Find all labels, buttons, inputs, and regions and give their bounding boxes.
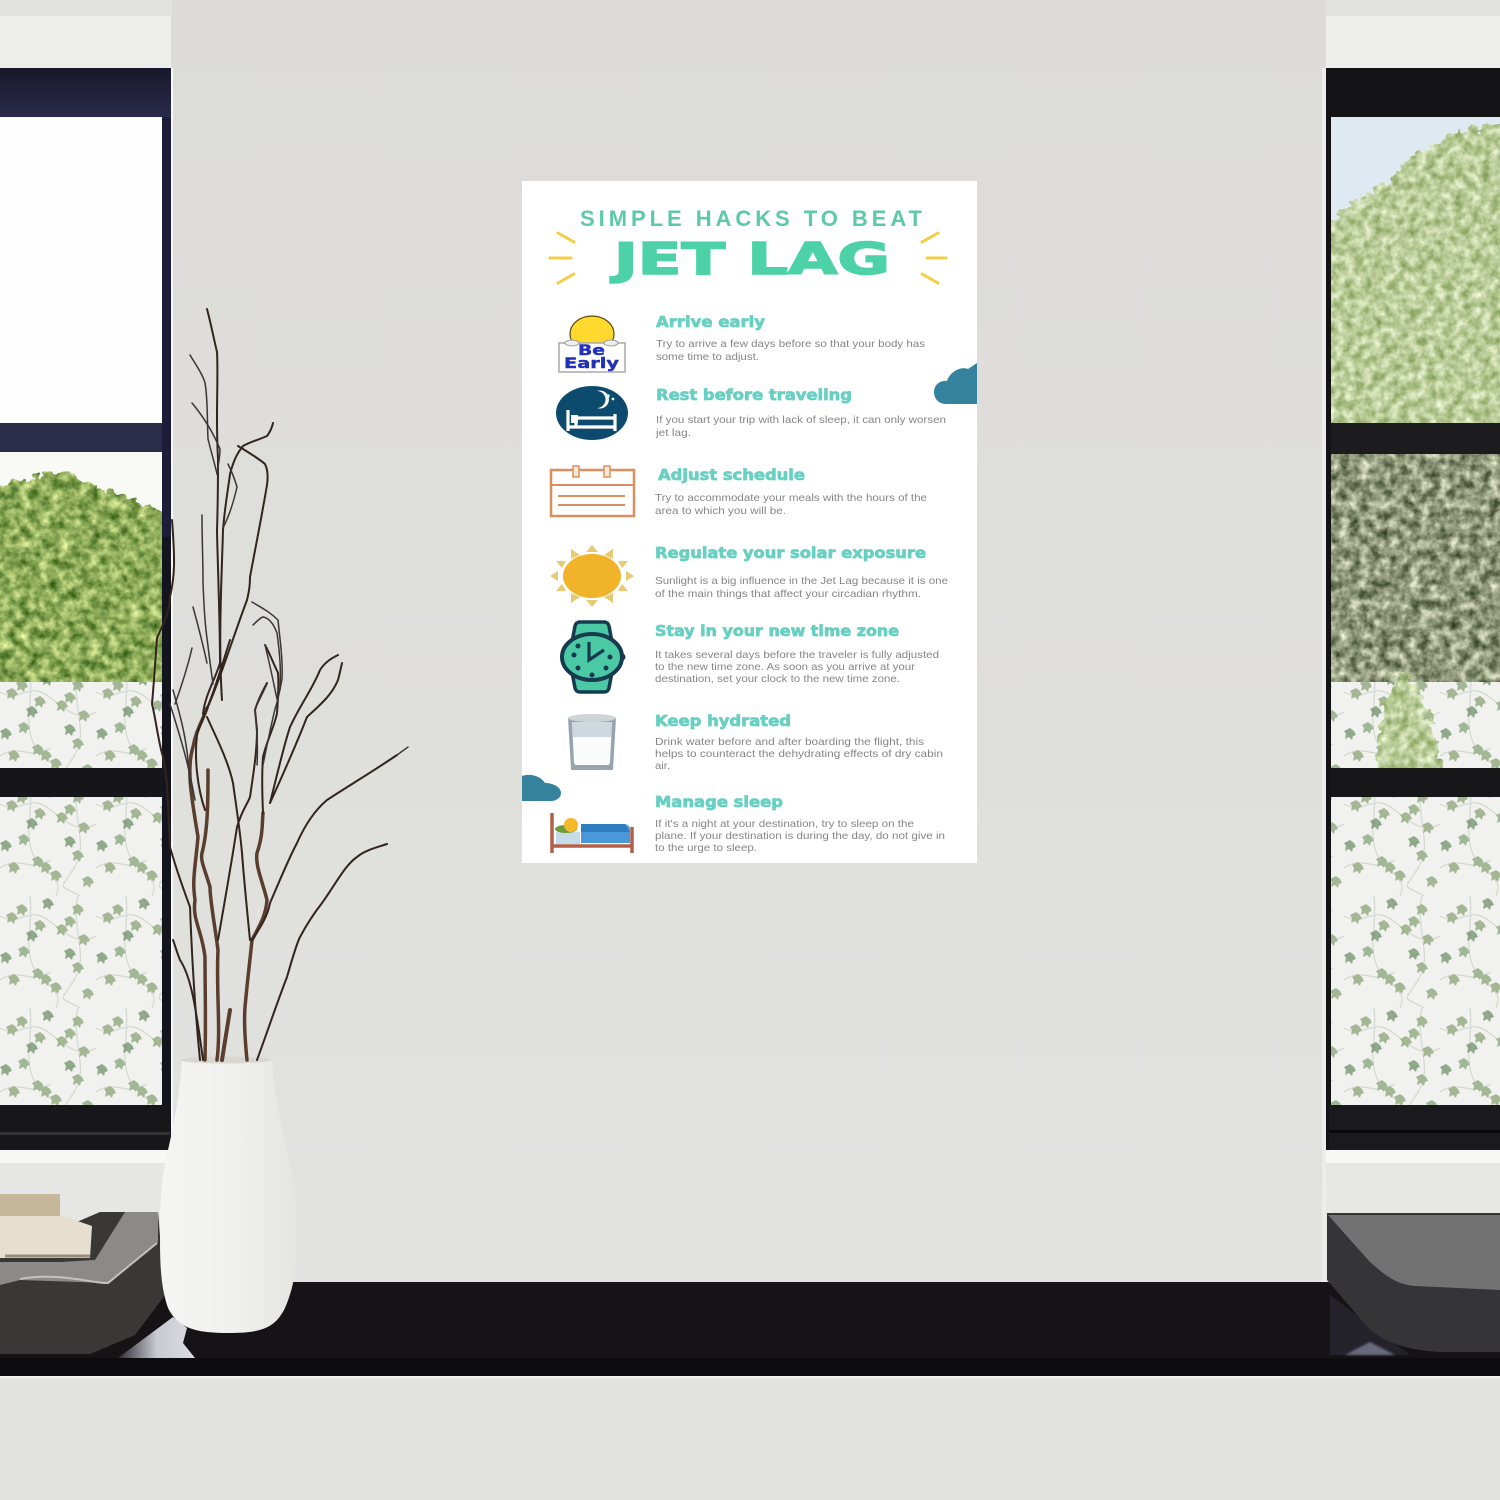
left window [0, 16, 173, 1163]
right window [1311, 0, 1500, 1288]
icon: calendar [551, 466, 634, 516]
right cushion top surface [1328, 1215, 1500, 1290]
step text: stay in your new time zone: to the new time zone. As soon as you arrive at your [655, 661, 916, 673]
step text: arrive early: Arrive early [656, 313, 765, 331]
step text: arrive early: Try to arrive a few days before so that your body has [656, 338, 925, 350]
step text: keep hydrated: Keep hydrated [655, 712, 791, 730]
icon: sun [550, 545, 634, 607]
right cloud [934, 363, 977, 404]
step text: arrive early [656, 313, 925, 363]
left cushion and blanket [0, 1194, 165, 1354]
step text: rest before traveling: If you start your trip with lack of sleep, it can only worsen [656, 414, 946, 426]
poster sheet [522, 181, 977, 863]
step text: rest before traveling [655, 386, 946, 439]
step text: manage sleep [655, 793, 945, 854]
step text: stay in your new time zone: destination, set your clock to the new time zone. [655, 673, 900, 685]
step text: arrive early: some time to adjust. [656, 351, 759, 363]
step text: adjust schedule: Try to accommodate your meals with the hours of the [655, 492, 927, 504]
step text: keep hydrated [655, 712, 943, 772]
step text: adjust schedule: Adjust schedule [658, 466, 805, 484]
step text: stay in your new time zone [655, 622, 939, 685]
icon: be early sign [559, 316, 625, 372]
icon: bed at night [556, 386, 628, 440]
step text: keep hydrated: air. [655, 760, 670, 772]
icon: be early sign: Early [564, 356, 619, 372]
step text: stay in your new time zone: Stay in your new time zone [655, 622, 899, 640]
step text: rest before traveling: jet lag. [655, 427, 691, 439]
step text: regulate your solar exposure [655, 544, 948, 600]
step text: manage sleep: to the urge to sleep. [655, 842, 757, 854]
icon: wristwatch [562, 622, 626, 692]
step text: regulate your solar exposure: Regulate your solar exposure [655, 544, 926, 562]
title: simple hacks to beat: SIMPLE HACKS TO BEAT [580, 206, 923, 231]
step text: regulate your solar exposure: Sunlight is a big influence in the Jet Lag because it is one [655, 575, 948, 587]
step text: manage sleep: If it's a night at your destination, try to sleep on the [655, 818, 914, 830]
right cushion [1327, 1213, 1500, 1352]
yellow title rays [550, 233, 946, 283]
vase [160, 1056, 297, 1333]
step text: manage sleep: plane. If your destination is during the day, do not give in [655, 830, 945, 842]
step text: adjust schedule [655, 466, 927, 517]
title: jet lag: JET LAG [610, 234, 890, 285]
poster [522, 181, 977, 863]
icon: person sleeping in bed [552, 813, 632, 853]
icon: glass of water [568, 714, 616, 770]
step text: regulate your solar exposure: of the main things that affect your circadian rhythm. [655, 588, 921, 600]
icon: be early sign: Be [578, 343, 605, 359]
step text: keep hydrated: Drink water before and after boarding the flight, this [655, 736, 924, 748]
step text: rest before traveling: Rest before traveling [656, 386, 852, 404]
step text: adjust schedule: area to which you will be. [655, 505, 786, 517]
dry branches [152, 309, 408, 1060]
step text: keep hydrated: helps to counteract the dehydrating effects of dry cabin [655, 748, 943, 760]
step text: manage sleep: Manage sleep [655, 793, 783, 811]
left cloud [522, 775, 561, 801]
black window-seat shelf [0, 1282, 1500, 1500]
step text: stay in your new time zone: It takes several days before the traveler is fully adjusted [655, 649, 939, 661]
